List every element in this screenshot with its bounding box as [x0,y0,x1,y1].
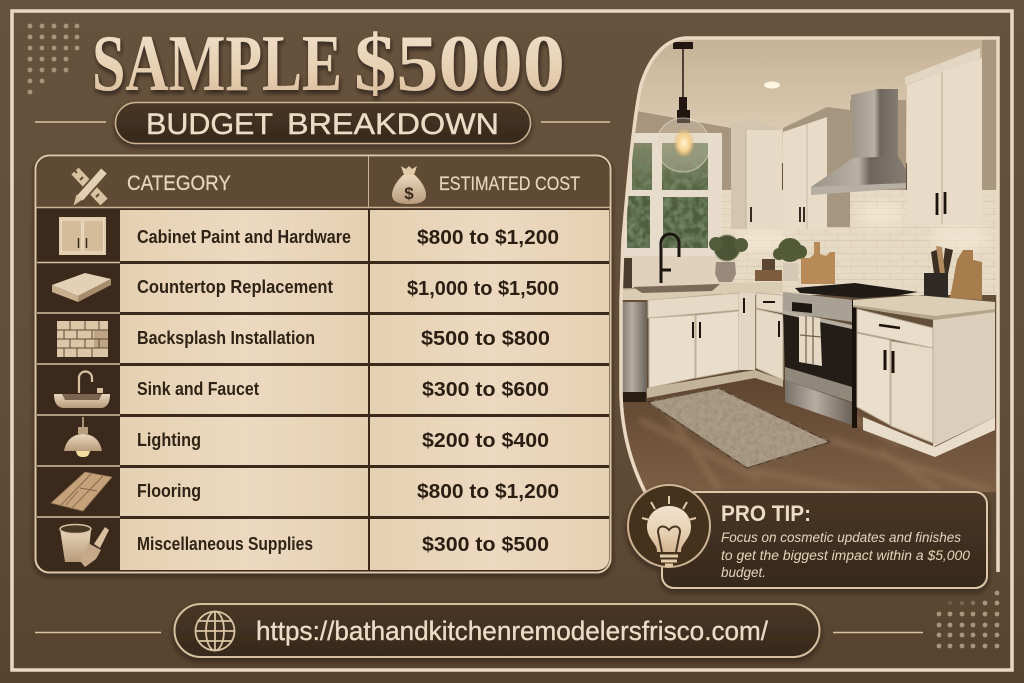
rug [648,388,830,468]
title: $5000 [354,20,565,108]
icon: money bag: $ [404,184,414,203]
subtitle rules [35,121,610,123]
icon: wood planks [51,472,112,511]
row: flooring [51,468,609,516]
row: sink and faucet: Sink and Faucet [137,379,259,399]
website pill [174,604,820,657]
icon: money bag [392,166,426,204]
under cabinet glow [732,203,990,252]
row: miscellaneous supplies: $300 to $500 [422,533,549,556]
row: cabinet paint and hardware [59,210,609,261]
ceiling and walls [638,40,982,163]
row: backsplash installation: Backsplash Installation [137,328,315,348]
row: sink and faucet: $300 to $600 [422,378,549,401]
row: cabinet paint and hardware: Cabinet Paint and Hardware [137,227,351,247]
faucet and plants [622,234,835,288]
row: lighting [64,417,609,465]
range [783,283,918,428]
icon: sink and faucet [54,372,110,408]
icon: pendant lamp [64,417,102,457]
window [624,133,722,257]
row: countertop replacement: Countertop Replacement [137,277,333,297]
icon: light bulb badge [628,485,710,567]
upper right cabinet [905,48,982,225]
pro tip callout [628,485,987,588]
right base cabinet [857,309,995,457]
dishwasher [620,302,647,393]
pro tip body: to get the biggest impact within a $5,000 [721,548,971,563]
recessed light [764,82,780,88]
pro tip body: Focus on cosmetic updates and finishes [721,530,961,545]
icon: globe [196,612,234,650]
row: flooring: Flooring [137,481,201,501]
base cabinets [647,293,783,398]
range hood [811,89,906,195]
icon: tile backsplash [57,321,108,357]
photo frame [621,38,998,572]
row: countertop replacement [52,264,609,312]
row: lighting: $200 to $400 [422,429,549,452]
row: backsplash installation: $500 to $800 [421,327,550,350]
dot pattern: bottom right [937,591,999,648]
pro tip heading: PRO TIP: [721,501,811,526]
right countertop [853,295,995,320]
icon: pencil and ruler [72,168,104,206]
title: SAMPLE [92,20,342,108]
dot pattern: top left [28,24,79,94]
pendant light [656,42,710,172]
row: lighting: Lighting [137,430,201,450]
row: sink and faucet [54,366,609,414]
subtitle pill: BREAKDOWN [287,108,499,141]
header: category: CATEGORY [127,172,231,195]
header: estimated cost: ESTIMATED COST [439,174,580,195]
panel: budget table [36,156,610,572]
kitchen photo [620,38,1000,498]
row: miscellaneous supplies [60,519,609,570]
subtitle pill: BUDGET [146,108,273,141]
row: countertop replacement: $1,000 to $1,500 [407,277,559,300]
pro tip body [721,530,971,580]
website url: https://bathandkitchenremodelersfrisco.com/ [256,616,768,646]
utensils and boards [924,246,982,300]
row: miscellaneous supplies: Miscellaneous Supplies [137,534,313,554]
icon column dividers [37,262,120,517]
floor [620,378,1000,498]
footer rules [35,632,923,634]
backsplash [722,190,998,295]
subtitle pill [116,102,530,144]
table header [36,156,610,208]
left countertop [620,282,783,300]
pro tip body: budget. [721,565,766,580]
row: cabinet paint and hardware: $800 to $1,200 [417,226,559,249]
icon: countertop slab [52,273,111,302]
icon: cabinet [59,217,106,255]
row: backsplash installation [57,315,609,363]
upper cabinets [731,107,850,229]
icon: paint bucket and brush [60,524,109,567]
row: flooring: $800 to $1,200 [417,480,559,503]
